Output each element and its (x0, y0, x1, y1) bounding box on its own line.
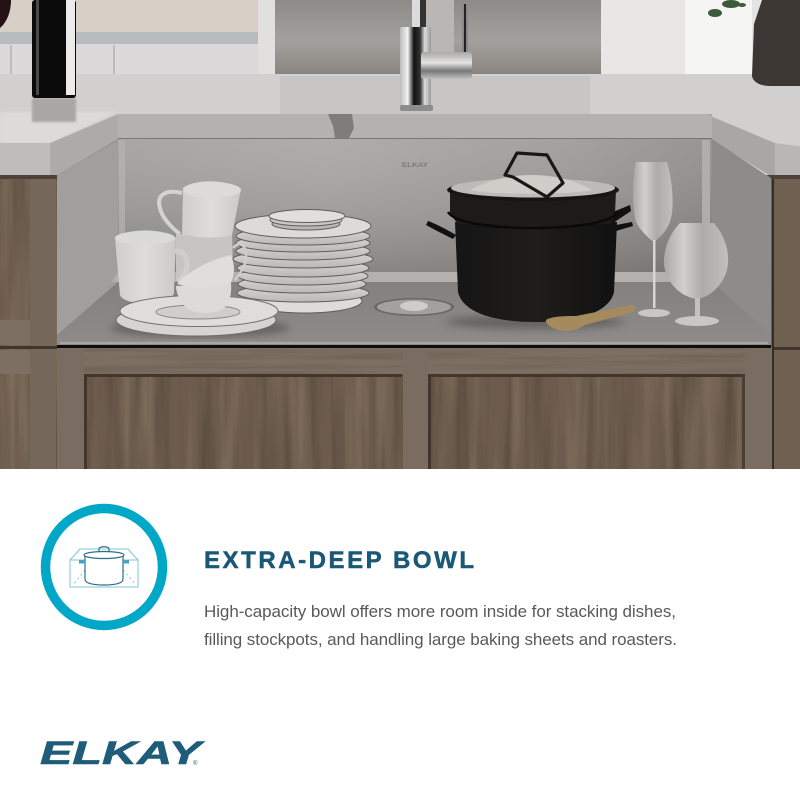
body text: filling stockpots, and handling large baking sheets and roasters. (204, 630, 677, 649)
corner seams (119, 140, 710, 275)
icon ring (46, 508, 162, 626)
wine bottle (32, 0, 76, 98)
drain (374, 298, 454, 316)
faucet (400, 0, 472, 111)
plant leaves (708, 0, 746, 17)
sink back wall (118, 139, 712, 284)
countertop surface (0, 74, 800, 146)
counter reflections (0, 76, 590, 143)
floor front highlight (60, 342, 768, 344)
icon: pot in deep bowl (46, 508, 162, 626)
stainless appliance panel (275, 0, 601, 74)
plate stack (233, 210, 373, 313)
wood cabinet (0, 175, 800, 469)
logo: Elkay: ELKAY (40, 735, 205, 771)
front plates and cups (116, 244, 278, 336)
counter front edges (0, 114, 800, 175)
marble back edge (118, 114, 712, 140)
wooden spoon (546, 305, 636, 331)
shadows under dishes (110, 315, 625, 337)
sink left wall (57, 140, 118, 335)
brandy glass (664, 223, 728, 326)
wine glass (633, 162, 673, 317)
bowl outline (70, 549, 138, 587)
vase (752, 0, 800, 86)
sink right wall (712, 140, 771, 335)
heading: EXTRA-DEEP BOWL (204, 547, 474, 574)
stockpot with lid (426, 153, 633, 322)
wall and backsplash background (0, 0, 800, 80)
sink basin backing (57, 139, 771, 345)
dark glass at top left (0, 0, 11, 28)
pot (79, 547, 129, 585)
body text: High-capacity bowl offers more room inside for stacking dishes, (204, 602, 676, 621)
sink logo: ELKAY (402, 162, 429, 169)
mugs (115, 181, 241, 303)
logo: Elkay (40, 735, 205, 771)
sink floor (57, 282, 771, 345)
white lower background (0, 469, 800, 800)
floor ledge (112, 272, 716, 282)
photo: kitchen sink scene (0, 0, 800, 469)
logo: Elkay: ® (193, 760, 198, 767)
body text (204, 602, 677, 649)
sink front lip (57, 345, 771, 348)
